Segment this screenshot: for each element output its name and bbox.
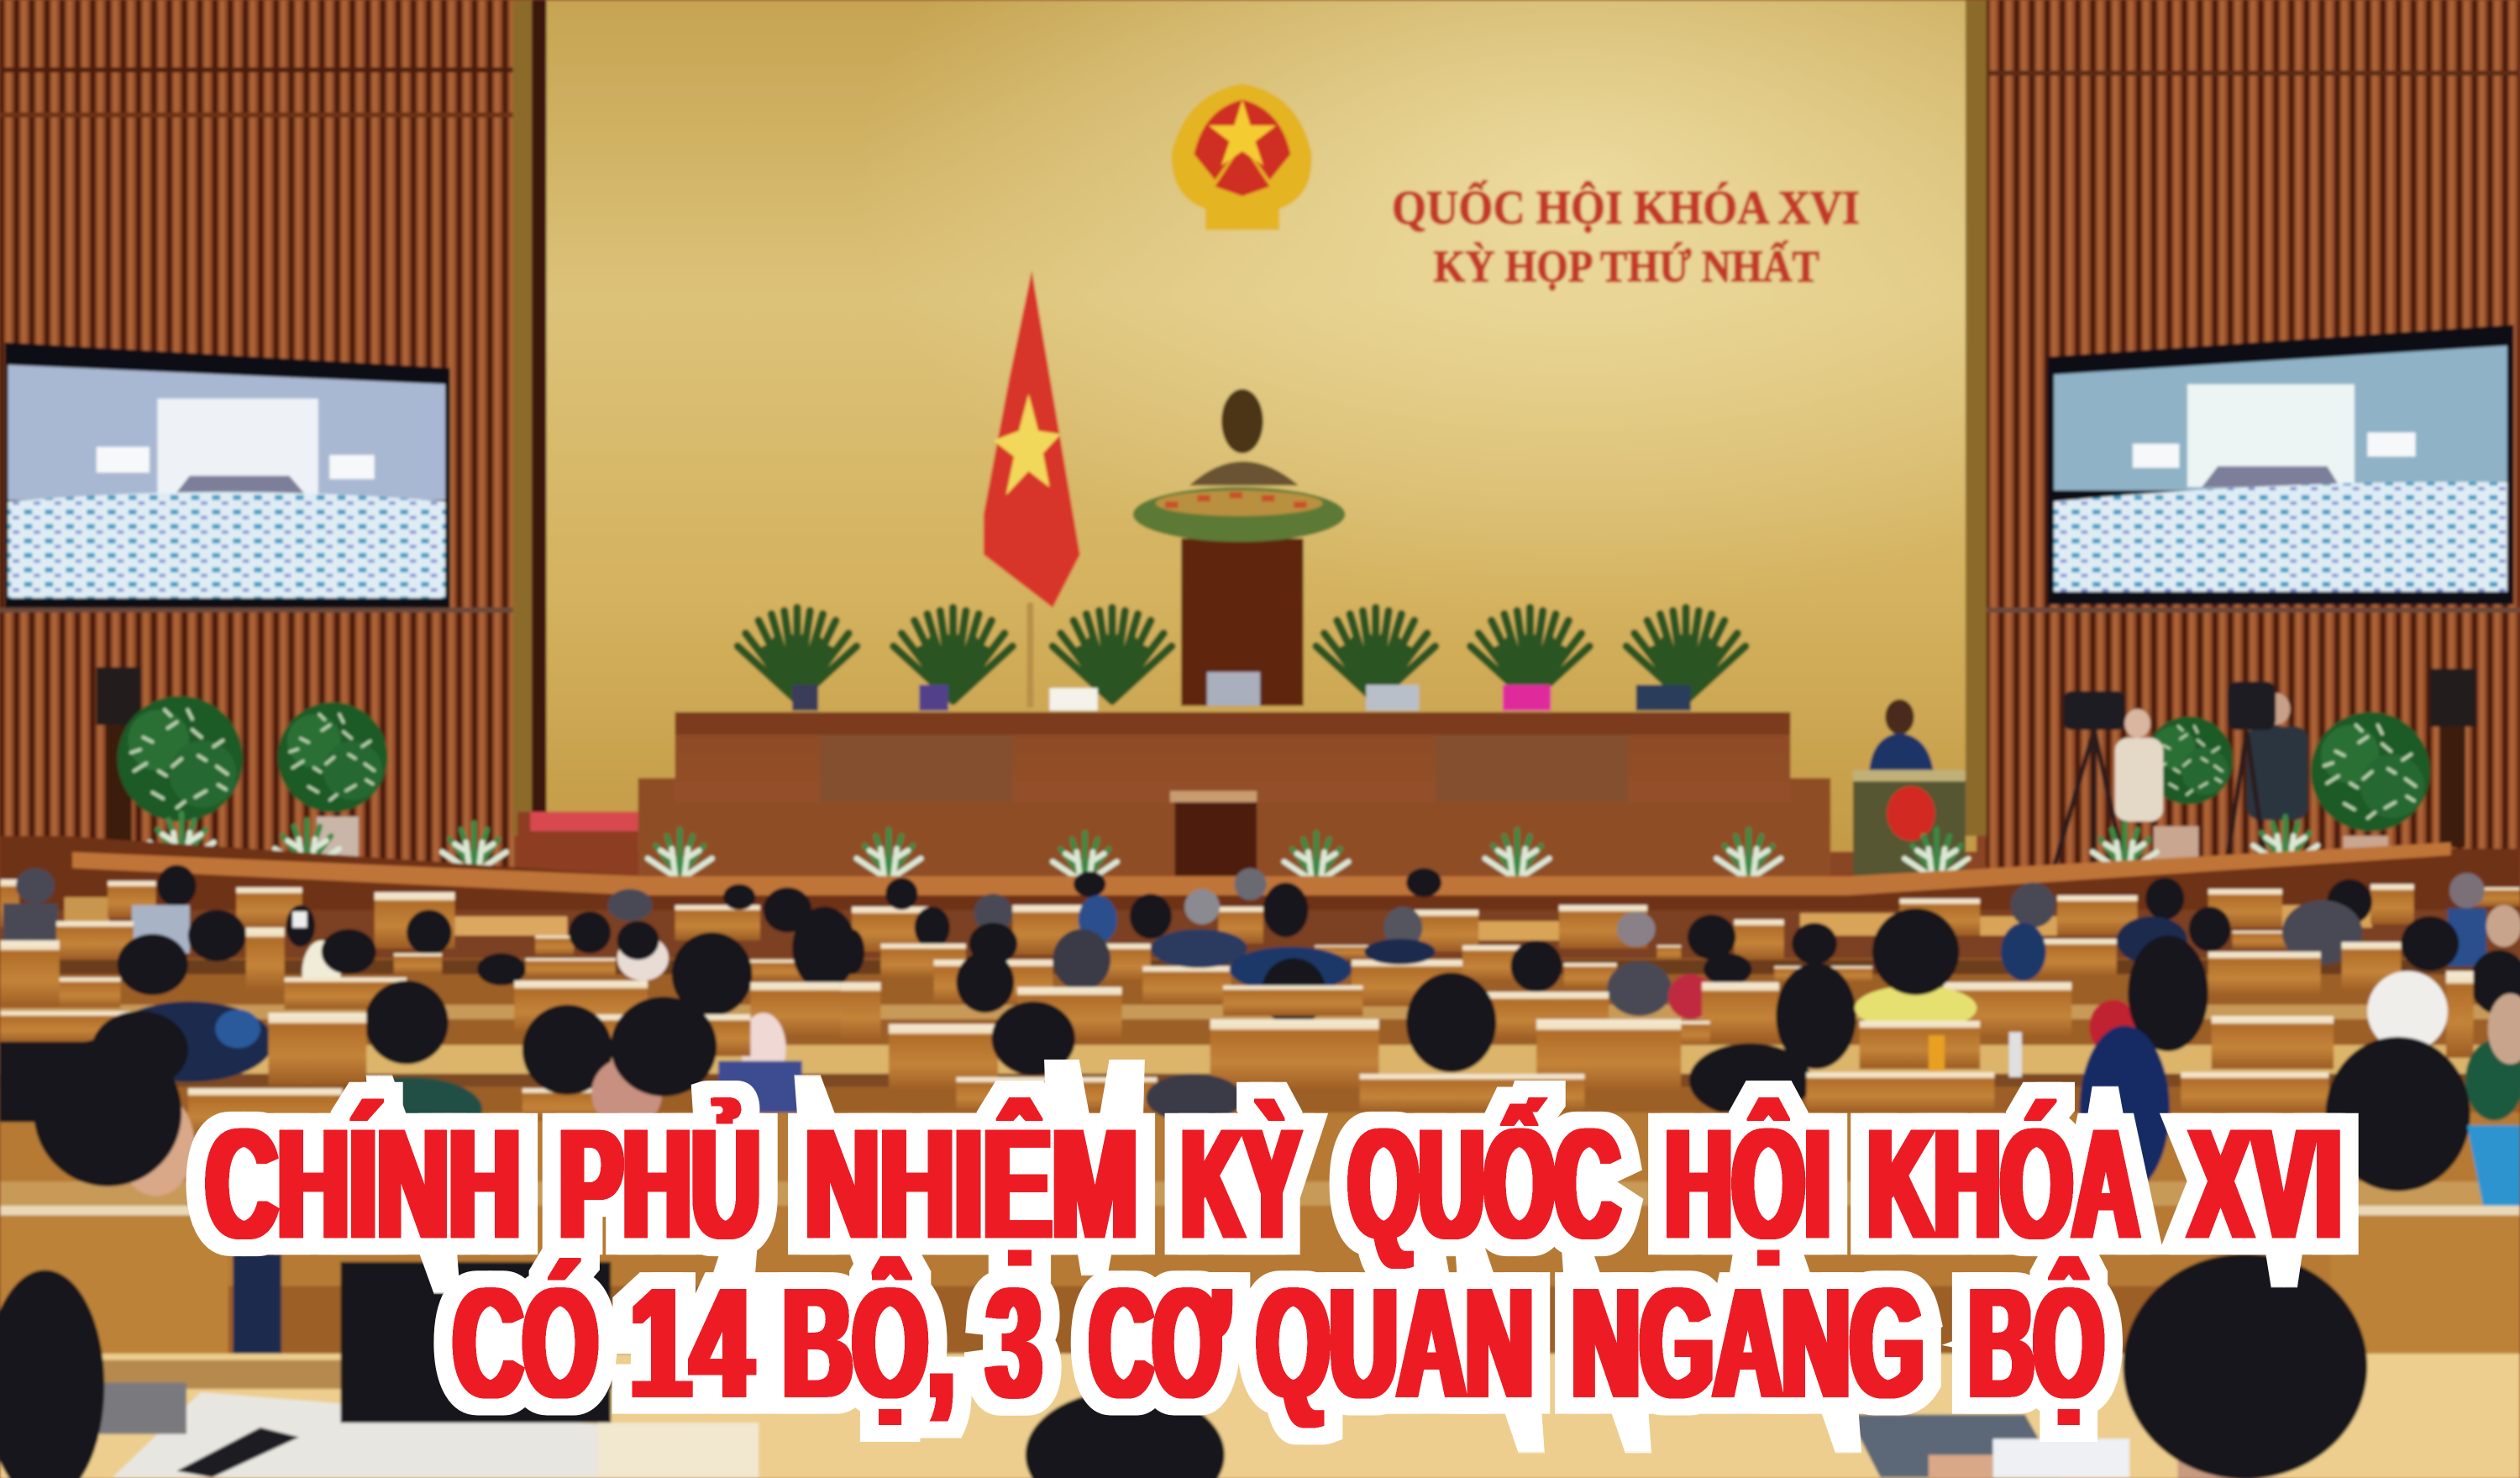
seats: fourth row [269,1013,2334,1093]
headline line 2: CÓ [454,1255,598,1431]
headline line 1: QUỐC [1348,1096,1620,1271]
red carpet steps [517,812,638,880]
wall lettering: QUỐC HỘI KHÓA XVI [1392,181,1860,234]
title banner: two-line headline [206,1096,2342,1431]
panel: right wood wall [1966,0,2520,876]
headline line 1: CHÍNH [206,1096,521,1271]
wall lettering: KỲ HỌP THỨ NHẤT [1434,241,1819,292]
delegates: back row [3,865,2520,966]
speaker's podium [1853,699,1966,876]
headline line 1: KHÓA [1867,1096,2139,1271]
headline line 2: QUAN [1257,1255,1533,1431]
bust and pedestal [1133,389,1345,706]
headline line 1: PHỦ [559,1096,760,1271]
headline line 2: 3 [987,1255,1042,1431]
main dais [638,713,1830,880]
headline line 2: BỘ [1969,1255,2103,1431]
small plants along the stage [150,813,2318,881]
headline line 2 [454,1255,2103,1431]
presiding officers [792,672,1691,711]
seats: back row [0,880,2520,960]
flag [984,270,1080,707]
seats: front row [188,1072,2328,1137]
headline line 2: BỘ, [783,1255,954,1431]
headline line 2: 14 [630,1255,752,1431]
delegates: fourth row [991,935,2208,1118]
seats: second row [0,921,2401,1008]
foreground delegates [0,1254,2367,1478]
headline line 1: XVI [2189,1096,2342,1271]
foreground row of desks [0,1112,2520,1366]
audience floor and desks [0,897,2520,1478]
palms [738,608,1746,701]
back wall [538,0,1977,852]
headline line 2: CƠ [1089,1255,1228,1431]
headline line 1: NHIỆM [806,1096,1138,1271]
headline line 2: NGANG [1572,1255,1924,1431]
headline line 1: HỘI [1665,1096,1830,1271]
seats: third row [0,971,2474,1058]
headline line 1: KỲ [1181,1096,1300,1271]
left screen [5,343,450,608]
delegates: second row [118,907,2520,1026]
wall lettering [1392,181,1860,292]
speakers [97,667,2476,847]
left potted bushes [118,696,387,857]
headline line 1 [206,1096,2342,1271]
state emblem [1172,83,1312,230]
panel: left wood wall [0,0,547,876]
delegates: third row [106,908,2448,1112]
right potted bushes and camera crew [2054,681,2430,868]
front table surface [0,1262,2520,1478]
curved front rail of the stage [0,836,2520,965]
right screen [2048,324,2513,604]
delegates: front row [0,993,2520,1206]
